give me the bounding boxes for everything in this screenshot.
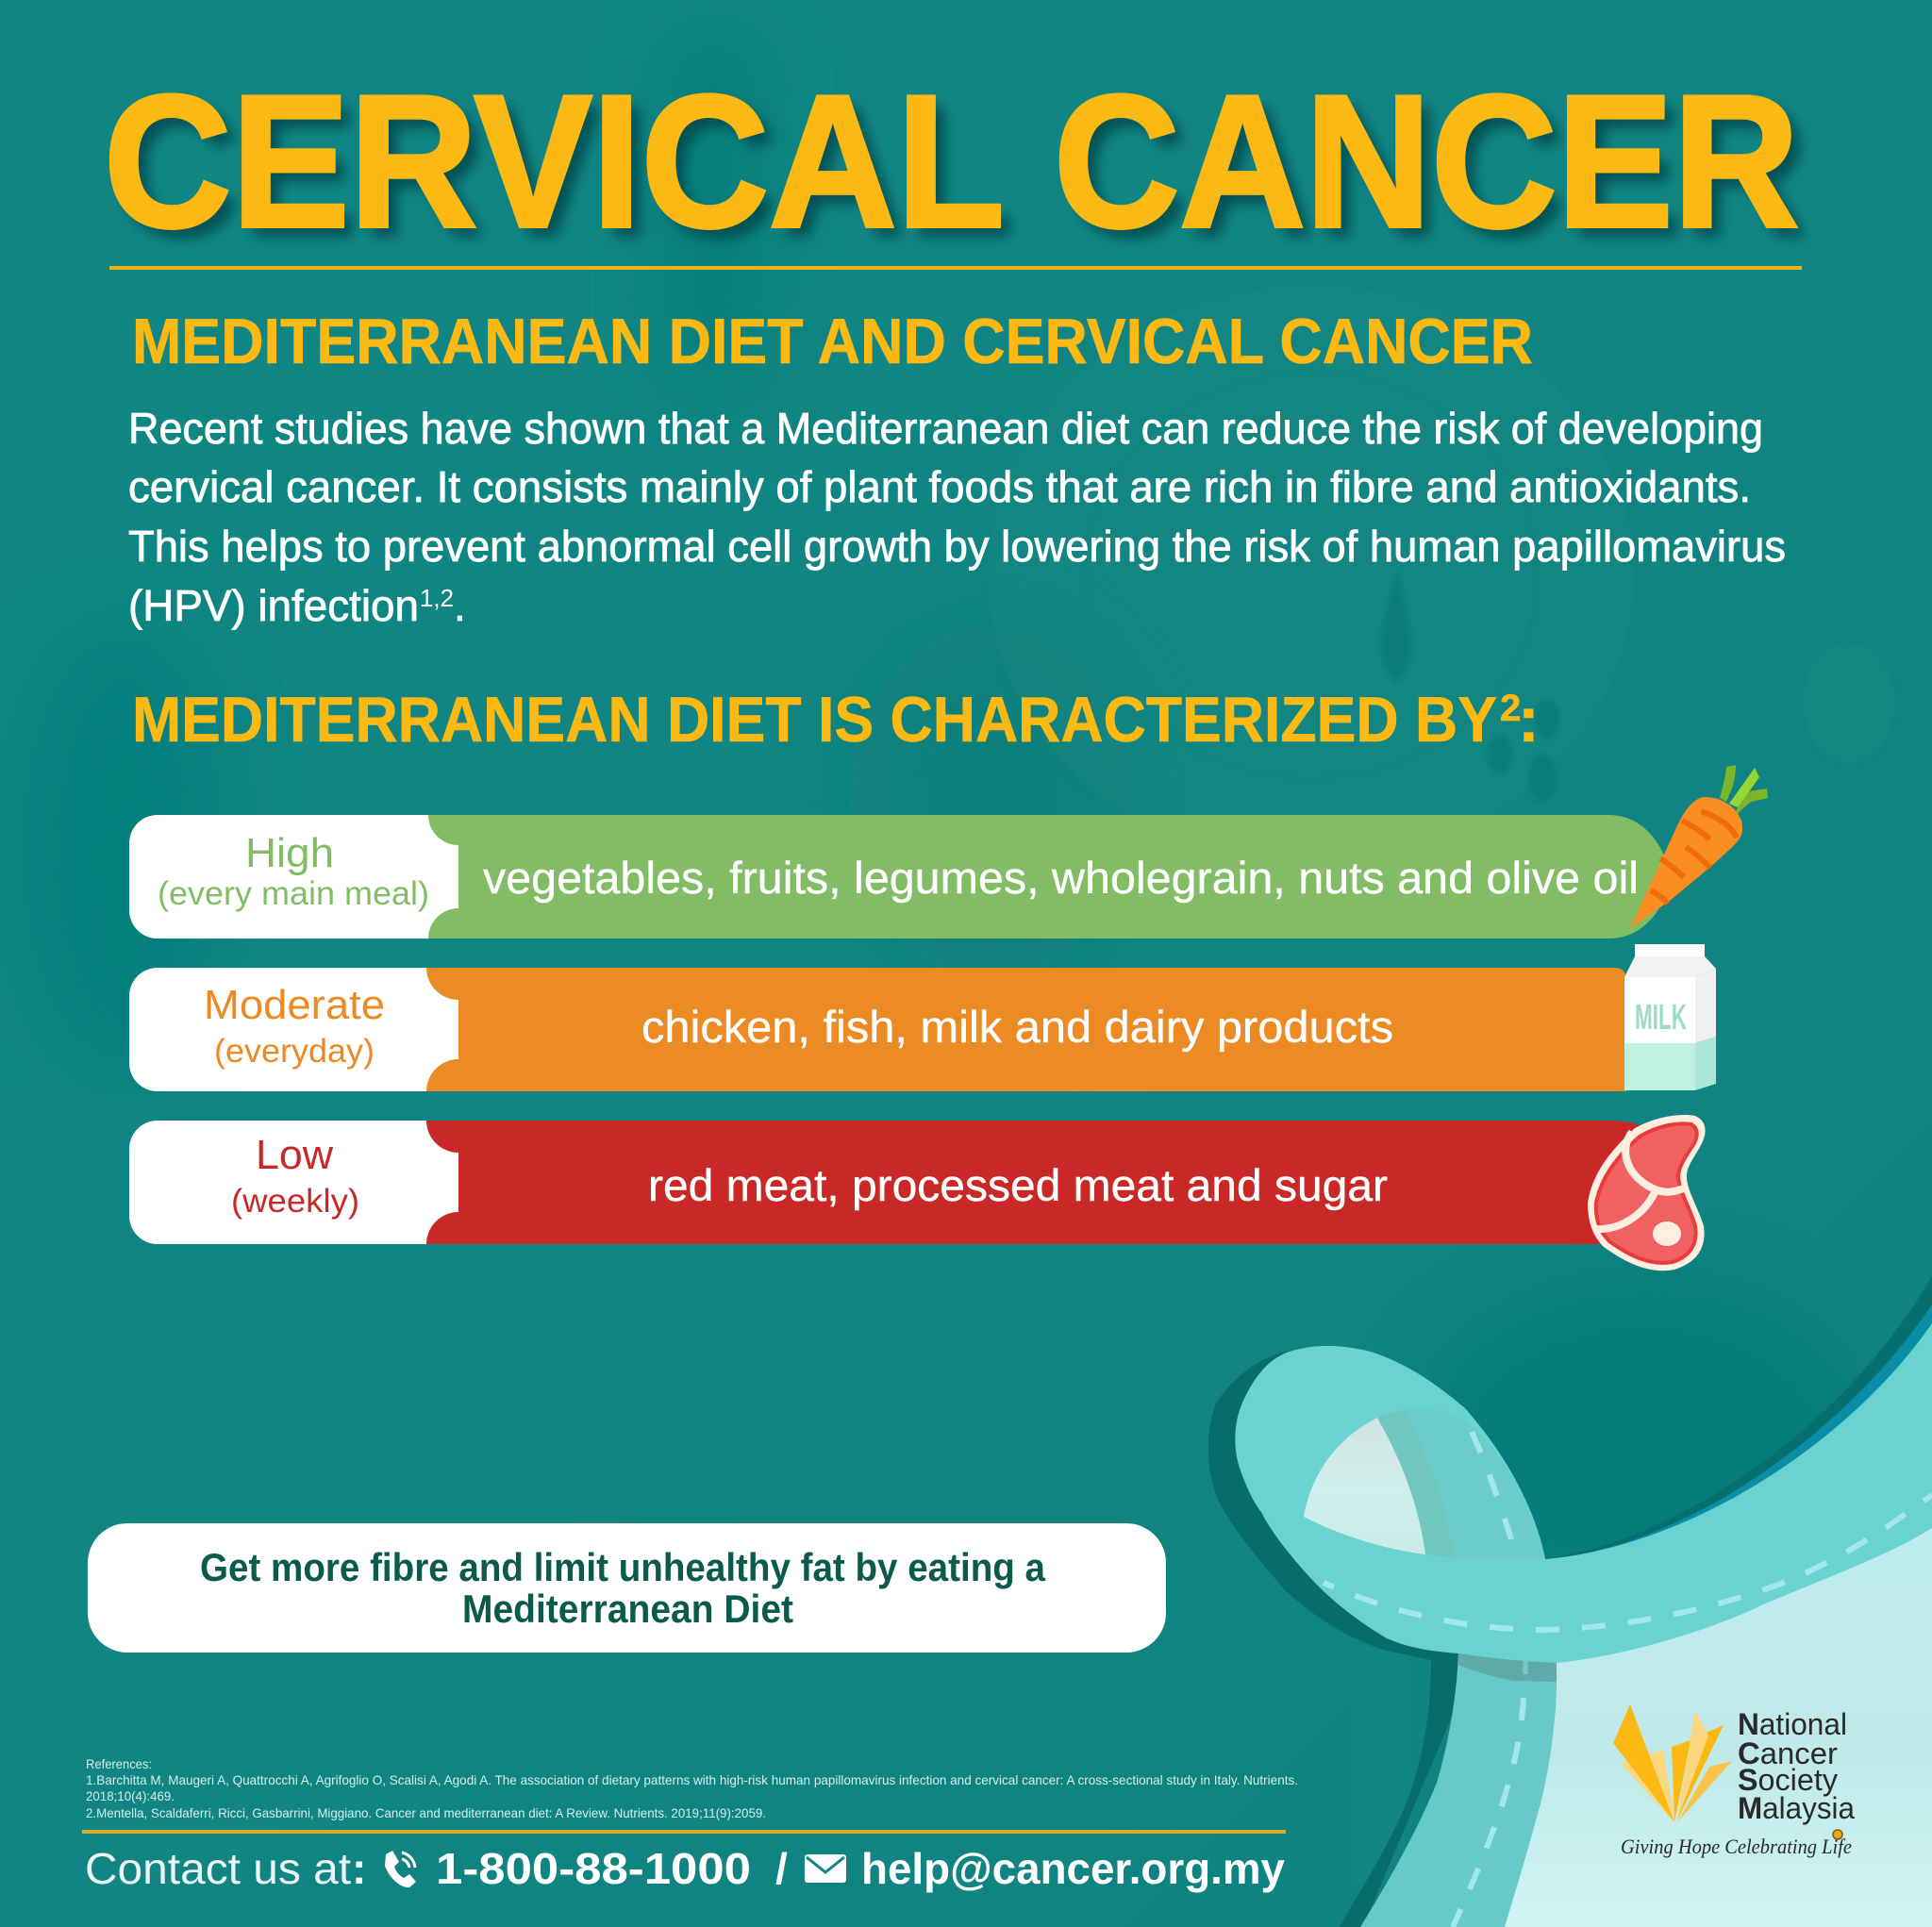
tail dashes — [1523, 1657, 1528, 1674]
bar low — [426, 1121, 1646, 1244]
logo spiral — [1833, 1830, 1842, 1839]
references: 2018;10(4):469. — [86, 1788, 175, 1803]
contact line: / — [775, 1844, 788, 1893]
ribbon band and loop — [1235, 1323, 1932, 1663]
row: low: (weekly) — [231, 1183, 359, 1220]
icon: milk carton — [1624, 944, 1716, 1090]
ribbon and pale corner — [1208, 1276, 1932, 1927]
row: high — [129, 815, 1672, 939]
lighter vertical streak — [1357, 1646, 1406, 1882]
ribbon blue sliver — [1545, 1304, 1932, 1559]
row: low — [129, 1121, 1646, 1244]
paragraph: (HPV) infection — [128, 581, 419, 630]
heading: diet is characterized by: 2 — [1500, 688, 1521, 729]
title — [104, 57, 1799, 267]
callout: Get more fibre and limit unhealthy fat by eating a — [200, 1545, 1046, 1589]
references — [86, 1756, 1298, 1820]
logo wordmark: Cancer — [1738, 1736, 1838, 1770]
ribbon dark shadow — [1545, 1276, 1932, 1559]
text moderate: chicken, fish, milk and dairy products — [641, 1002, 1393, 1052]
row: moderate: (everyday) — [214, 1033, 375, 1070]
logo wordmark: Society — [1738, 1763, 1838, 1797]
label panel high — [129, 815, 469, 939]
contact line — [85, 1844, 1285, 1893]
loop inner strip — [1377, 1410, 1455, 1558]
band dashes — [1324, 1495, 1932, 1630]
heading: mediterranean diet and cervical cancer: MEDITERRANEAN DIET AND CERVICAL CANCER — [132, 306, 1533, 377]
contact line: : — [352, 1844, 366, 1893]
label moderate: Moderate — [204, 982, 385, 1028]
paragraph — [128, 404, 1786, 630]
title: CANCER — [1054, 57, 1799, 267]
ribbon left shadow — [1208, 1351, 1472, 1927]
heading: diet is characterized by: : — [1518, 684, 1540, 756]
paragraph: Recent studies have shown that a Mediterranean diet can reduce the risk of developing — [128, 404, 1763, 453]
pale corner background — [1500, 1500, 1932, 1927]
logo tagline: Giving Hope Celebrating Life — [1621, 1835, 1852, 1858]
title: CANCER — [1054, 57, 1799, 267]
callout — [88, 1523, 1166, 1653]
logo wordmark: National — [1738, 1707, 1847, 1741]
callout: Mediterranean Diet — [462, 1586, 793, 1631]
bar high — [428, 815, 1672, 939]
loop hole — [1304, 1418, 1425, 1554]
heading: diet is characterized by: MEDITERRANEAN DIET IS CHARACTERIZED BY — [132, 684, 1497, 756]
bar moderate — [426, 968, 1626, 1091]
text low: red meat, processed meat and sugar — [648, 1160, 1388, 1210]
text high: vegetables, fruits, legumes, wholegrain, nuts and olive oil — [483, 853, 1639, 903]
paragraph: cervical cancer. It consists mainly of plant foods that are rich in fibre and antioxidants. — [128, 462, 1751, 511]
row: moderate — [129, 968, 1626, 1091]
label low: Low — [256, 1132, 333, 1178]
icon: envelope — [805, 1854, 846, 1883]
paragraph: 1,2 — [420, 584, 454, 612]
ribbon tail — [1360, 1646, 1557, 1927]
logo wordmark — [1738, 1707, 1855, 1825]
references: 2.Mentella, Scaldaferri, Ricci, Gasbarrini, Miggiano. Cancer and mediterranean diet: A Review. Nutrients. 2019;11(9):2059. — [86, 1805, 766, 1820]
logo — [1613, 1704, 1855, 1858]
paragraph: This helps to prevent abnormal cell growth by lowering the risk of human papillomavirus — [128, 522, 1786, 571]
paragraph: . — [454, 581, 466, 630]
loop dashes — [1472, 1432, 1511, 1539]
label high: High — [245, 830, 334, 876]
icon: meat — [1588, 1115, 1706, 1271]
icon: carrot — [1630, 765, 1768, 928]
title: CERVICAL — [104, 57, 1005, 267]
loop back — [1404, 1408, 1545, 1558]
contact line: help@cancer.org.my — [861, 1844, 1285, 1893]
icon: milk carton: MILK — [1635, 998, 1687, 1038]
title: CERVICAL — [104, 57, 1005, 267]
references: References: — [86, 1756, 152, 1771]
logo mark — [1613, 1704, 1732, 1822]
row: high: (every main meal) — [158, 875, 429, 912]
logo wordmark: Malaysia — [1738, 1791, 1855, 1825]
references: 1.Barchitta M, Maugeri A, Quattrocchi A, Agrifoglio O, Scalisi A, Agodi A. The association of dietary patterns with high-risk human papillomavirus infection and cervical cancer: A cross-sectional study in Italy. Nutrients. — [86, 1772, 1298, 1787]
contact line: Contact us at — [85, 1844, 351, 1893]
label panel low — [129, 1121, 469, 1244]
icon: phone — [385, 1851, 416, 1887]
label panel moderate — [129, 968, 469, 1091]
contact line: 1-800-88-1000 — [436, 1844, 751, 1893]
tail shadow under band — [1458, 1646, 1557, 1682]
